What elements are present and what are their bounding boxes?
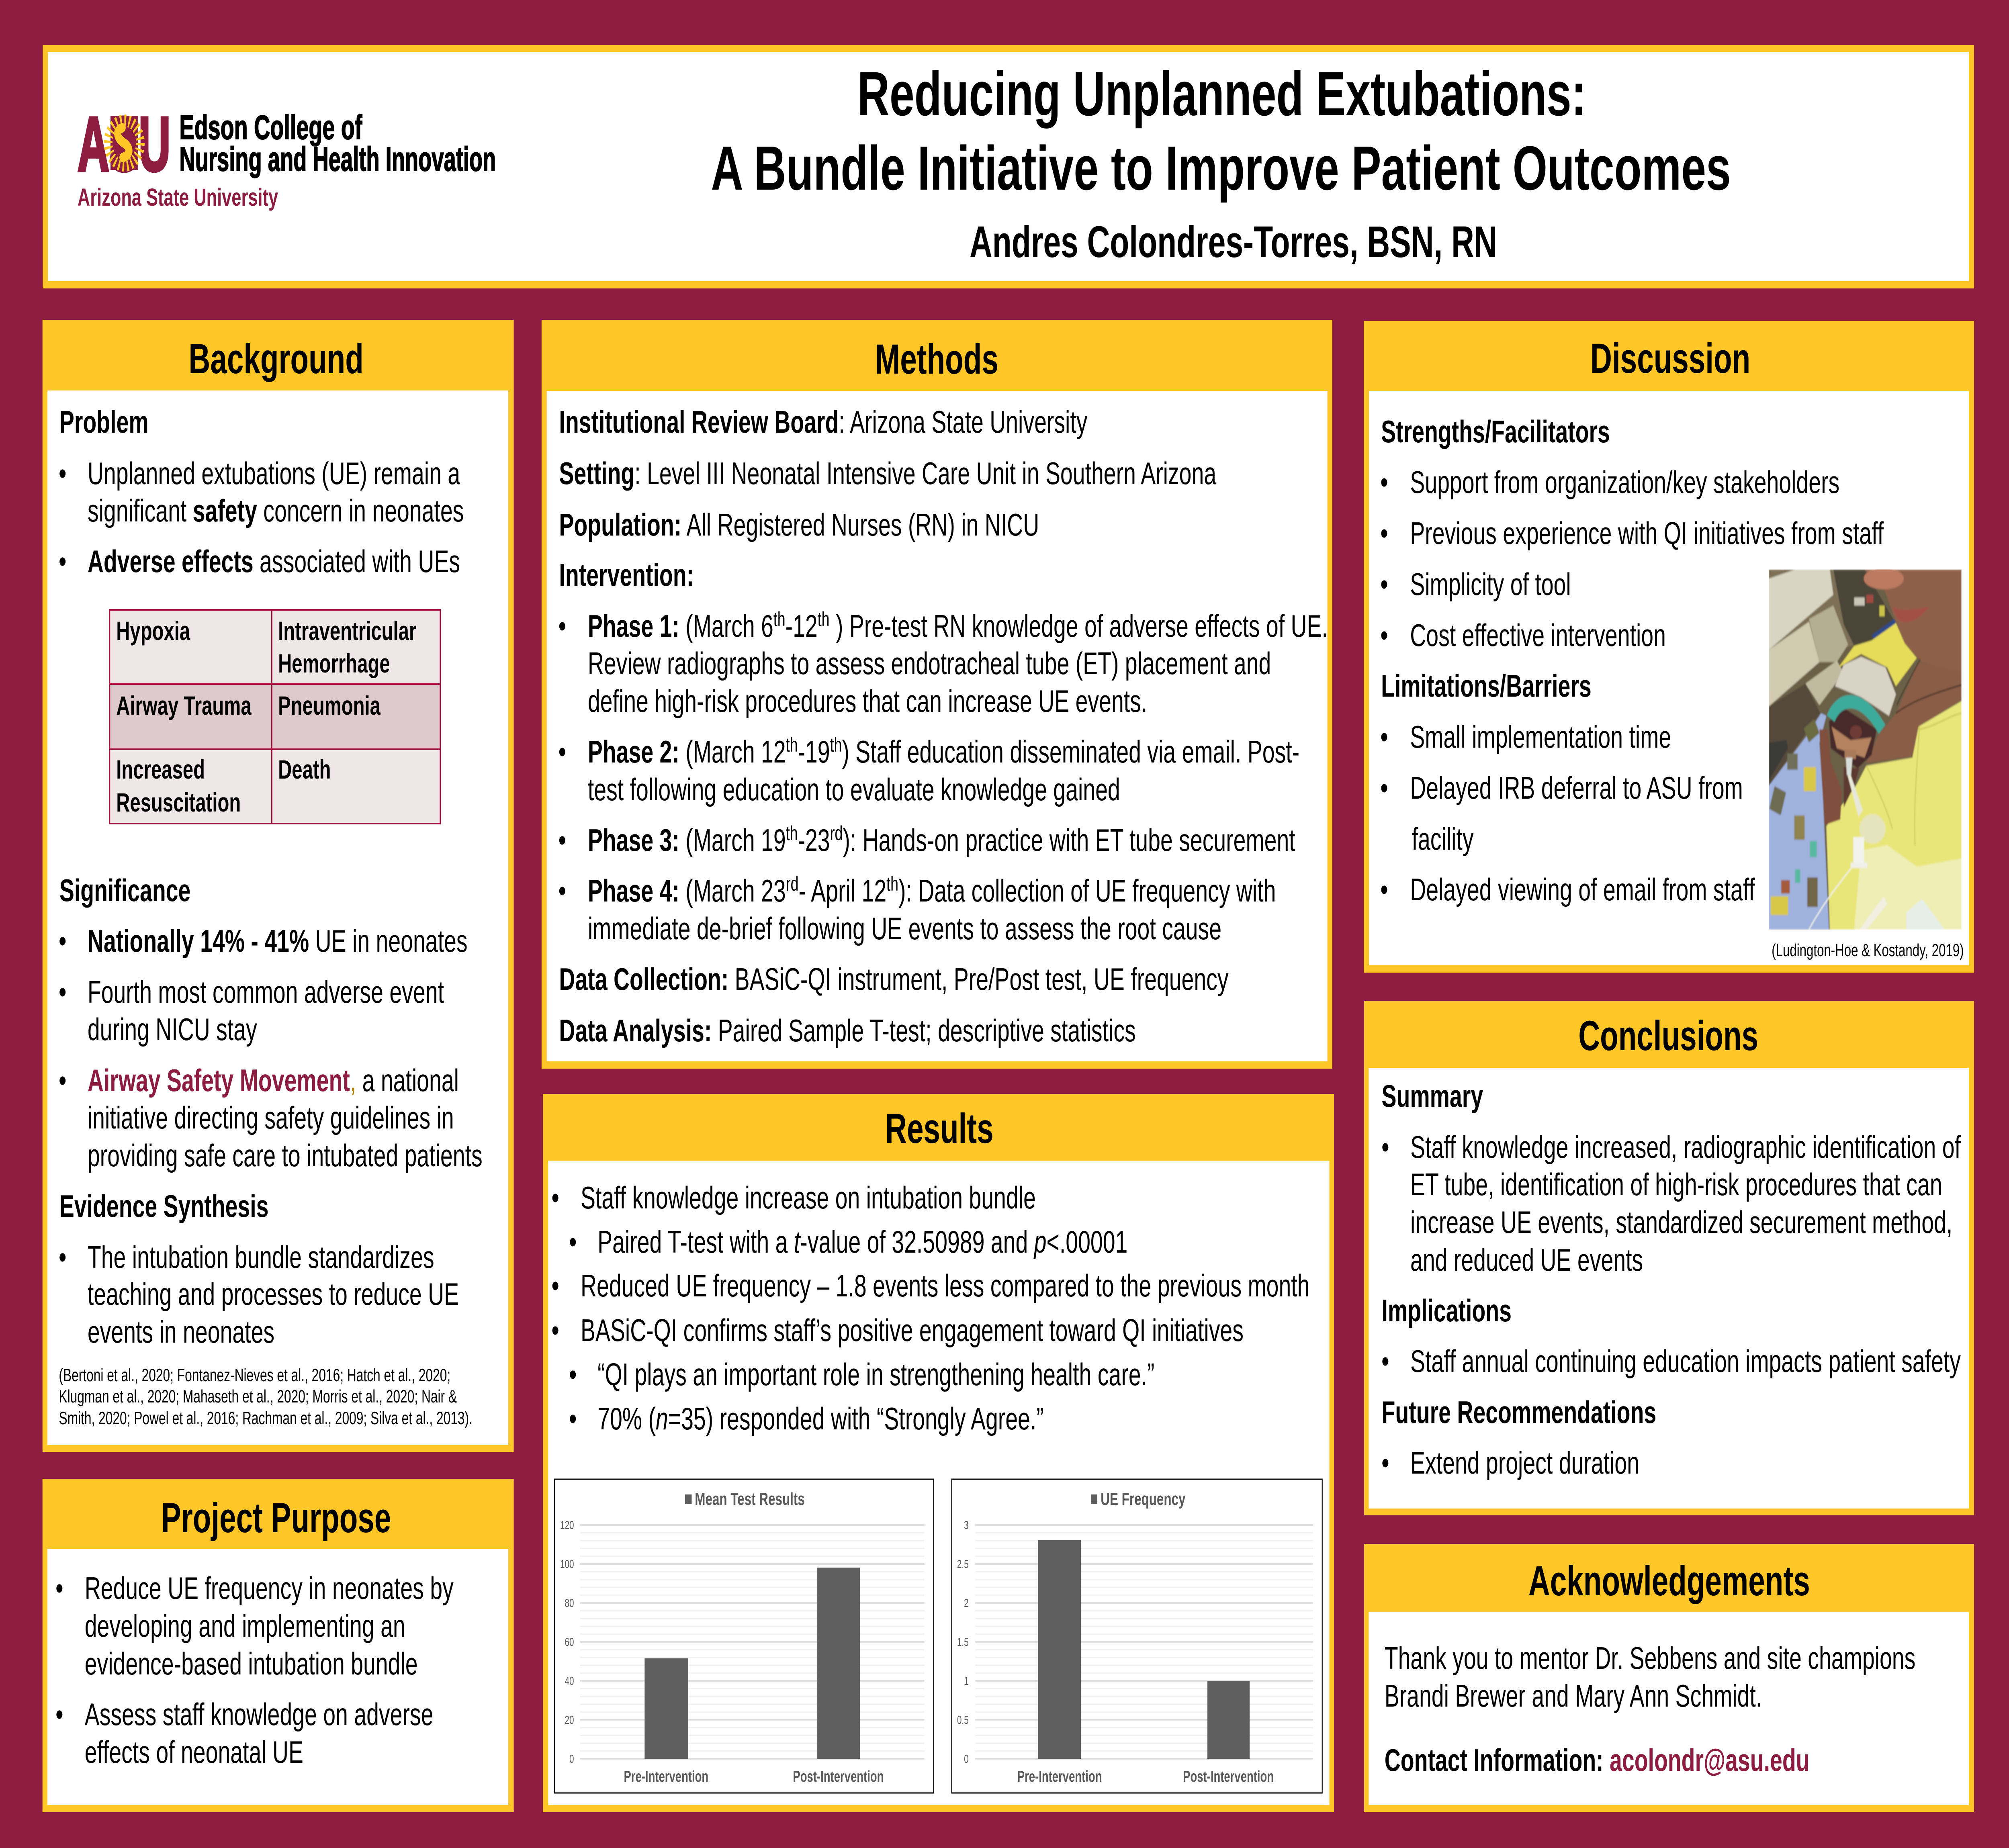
panel: conclusions bbox=[1364, 1001, 1974, 1515]
text block: future recommendations: • bbox=[1381, 1446, 1389, 1480]
text block: limitations: facility bbox=[1412, 822, 1474, 857]
table: adverse effects: Airway Trauma bbox=[116, 691, 252, 721]
text block: data collection and analysis bbox=[559, 962, 1229, 1048]
heading: results: Results bbox=[885, 1106, 994, 1152]
text block: purpose bullets: • bbox=[55, 1697, 63, 1732]
table: adverse effects: Intraventricular bbox=[278, 616, 416, 646]
logo: ASU Edson College: Edson College of bbox=[179, 109, 362, 146]
text block: thanks bbox=[1385, 1641, 1915, 1713]
photo caption: (Ludington-Hoe & Kostandy, 2019) bbox=[1772, 941, 1964, 960]
bar chart: mean test results: 40 bbox=[565, 1675, 574, 1688]
title bbox=[711, 59, 1731, 203]
text block: data collection and analysis: Data Analysis: Paired Sample T-test; descriptive statistics bbox=[559, 1014, 1136, 1048]
text block: implications: Implications bbox=[1382, 1294, 1512, 1328]
text block: significance: Nationally 14% - 41% UE in neonates bbox=[88, 924, 468, 959]
text block: intervention phases: ) Staff education disseminated via email. Post- bbox=[842, 735, 1299, 769]
text block: intervention phases: Phase 3: (March 19 bbox=[588, 823, 786, 858]
text block: purpose bullets: developing and implementing an bbox=[85, 1609, 405, 1644]
text block: summary bbox=[1381, 1079, 1961, 1278]
logo: ASU Edson College: ASU bbox=[78, 101, 170, 187]
title: Reducing Unplanned Extubations: bbox=[857, 59, 1586, 129]
bar chart: UE frequency bbox=[952, 1479, 1322, 1793]
text block: significance: • bbox=[59, 924, 66, 959]
text block: implications bbox=[1381, 1294, 1961, 1379]
text block: problem: Problem bbox=[59, 405, 149, 440]
table: adverse effects: Resuscitation bbox=[116, 788, 241, 818]
bar chart: UE frequency: Pre-Intervention bbox=[1017, 1768, 1102, 1785]
bar chart: UE frequency: 0 bbox=[964, 1753, 969, 1766]
bar chart: UE frequency: 1 bbox=[964, 1675, 969, 1688]
text block: strengths: Simplicity of tool bbox=[1410, 567, 1571, 602]
text block: results bullets: • bbox=[569, 1402, 577, 1436]
text block: results bullets: • bbox=[551, 1313, 559, 1348]
text block: intervention phases: test following education to evaluate knowledge gained bbox=[588, 773, 1120, 807]
text block: strengths bbox=[1380, 415, 1884, 653]
text block: study details: Institutional Review Board: Arizona State University bbox=[559, 405, 1088, 440]
text block: problem: • bbox=[59, 544, 66, 579]
text block: strengths: • bbox=[1380, 618, 1388, 653]
text block: intervention phases: -12 bbox=[786, 609, 818, 644]
text block: intervention phases: th bbox=[830, 734, 842, 756]
text block: results bullets: Staff knowledge increase on intubation bundle bbox=[581, 1181, 1036, 1215]
text block: intervention phases: th bbox=[786, 822, 798, 845]
text block: purpose bullets: Reduce UE frequency in neonates by bbox=[85, 1571, 454, 1606]
bar chart: UE frequency: Post-Intervention bbox=[1183, 1768, 1274, 1785]
text block: significance bbox=[59, 873, 483, 1173]
bar chart: UE frequency: 3 bbox=[964, 1519, 969, 1532]
text block: results bullets: 70% (n=35) responded with “Strongly Agree.” bbox=[597, 1402, 1044, 1436]
bar chart: mean test results: 100 bbox=[560, 1558, 574, 1571]
panel: results bbox=[543, 1094, 1334, 1812]
text block: significance: Airway Safety Movement, a national bbox=[88, 1063, 459, 1098]
panel: acknowledgements bbox=[1364, 1544, 1974, 1812]
text block: study details: Population: All Registered Nurses (RN) in NICU bbox=[559, 508, 1039, 542]
text block: limitations: • bbox=[1380, 771, 1388, 805]
text block: significance: initiative directing safety guidelines in bbox=[88, 1101, 454, 1135]
text block: summary: Staff knowledge increased, radiographic identification of bbox=[1410, 1130, 1961, 1165]
text block: purpose bullets: • bbox=[55, 1571, 63, 1606]
table: adverse effects: Increased bbox=[116, 755, 205, 785]
text block: results bullets: “QI plays an important role in strengthening health care.” bbox=[597, 1357, 1154, 1392]
text block: problem bbox=[59, 405, 464, 579]
bar chart: UE frequency: UE Frequency bbox=[1101, 1489, 1186, 1509]
text block: significance: providing safe care to intubated patients bbox=[88, 1139, 483, 1173]
text block: intervention phases: -19 bbox=[798, 735, 830, 769]
text block: limitations: Limitations/Barriers bbox=[1381, 669, 1592, 703]
logo: ASU Edson College: Arizona State University bbox=[78, 184, 278, 211]
text block: intervention phases: Review radiographs to assess endotracheal tube (ET) placement and bbox=[588, 646, 1271, 681]
text block: intervention phases: - April 12 bbox=[798, 874, 886, 908]
bar chart: mean test results: 80 bbox=[565, 1597, 574, 1610]
heading: acknowledgements: Acknowledgements bbox=[1528, 1558, 1810, 1605]
text block: intervention phases: • bbox=[559, 823, 566, 858]
text block: summary: and reduced UE events bbox=[1410, 1243, 1643, 1278]
text block: future recommendations bbox=[1381, 1395, 1656, 1480]
text block: strengths: Cost effective intervention bbox=[1410, 618, 1666, 653]
text block: intervention phases: Phase 1: (March 6 bbox=[588, 609, 773, 644]
text block: significance: Significance bbox=[59, 873, 190, 908]
text block: intervention phases: th bbox=[773, 608, 786, 631]
text block: implications: Staff annual continuing education impacts patient safety bbox=[1410, 1344, 1961, 1379]
text block: strengths: • bbox=[1380, 567, 1388, 602]
heading: project purpose: Project Purpose bbox=[161, 1495, 391, 1541]
text block: results bullets bbox=[551, 1181, 1310, 1436]
text block: evidence synthesis: Evidence Synthesis bbox=[59, 1189, 268, 1224]
text block: purpose bullets bbox=[55, 1571, 454, 1770]
text block: evidence synthesis: • bbox=[59, 1240, 66, 1275]
title: A Bundle Initiative to Improve Patient Outcomes bbox=[711, 133, 1731, 203]
text block: limitations: • bbox=[1380, 720, 1388, 754]
table: adverse effects bbox=[110, 610, 440, 824]
text block: limitations: Delayed viewing of email from staff bbox=[1410, 873, 1755, 907]
text block: purpose bullets: effects of neonatal UE bbox=[85, 1735, 303, 1770]
text block: results bullets: • bbox=[569, 1357, 577, 1392]
text block: results bullets: • bbox=[551, 1181, 559, 1215]
text block: significance: • bbox=[59, 1063, 66, 1098]
text block: limitations: • bbox=[1380, 873, 1388, 907]
text block: significance: during NICU stay bbox=[88, 1012, 257, 1047]
bar chart: mean test results: 60 bbox=[565, 1636, 574, 1649]
text block: significance: • bbox=[59, 975, 66, 1010]
text block: intervention phases: Phase 4: (March 23 bbox=[588, 874, 786, 908]
table: adverse effects: Hypoxia bbox=[116, 616, 190, 646]
bar chart: UE frequency: 2 bbox=[964, 1597, 969, 1610]
bar chart: mean test results: 20 bbox=[565, 1714, 574, 1727]
logo: ASU Edson College bbox=[78, 101, 496, 211]
bar chart: mean test results: Pre-Intervention bbox=[624, 1768, 708, 1785]
text block: intervention phases: ) Pre-test RN knowledge of adverse effects of UE. bbox=[830, 609, 1328, 644]
text block: data collection and analysis: Data Collection: BASiC-QI instrument, Pre/Post test, UE frequency bbox=[559, 962, 1229, 997]
heading: conclusions: Conclusions bbox=[1578, 1013, 1758, 1059]
bar chart: mean test results: 0 bbox=[569, 1753, 574, 1766]
table: adverse effects: Death bbox=[278, 755, 331, 785]
text block: evidence synthesis: The intubation bundle standardizes bbox=[88, 1240, 434, 1275]
heading: methods: Methods bbox=[875, 336, 998, 383]
text block: intervention phases: th bbox=[818, 608, 830, 631]
references: Klugman et al., 2020; Mahaseth et al., 2020; Morris et al., 2020; Nair & bbox=[59, 1387, 457, 1406]
table: adverse effects: Hemorrhage bbox=[278, 649, 390, 679]
references: Smith, 2020; Powel et al., 2016; Rachman et al., 2009; Silva et al., 2013). bbox=[59, 1408, 473, 1428]
text block: study details bbox=[559, 405, 1217, 593]
text block: problem: Unplanned extubations (UE) remain a bbox=[88, 456, 460, 491]
panel: background bbox=[43, 320, 514, 1452]
text block: strengths: Support from organization/key stakeholders bbox=[1410, 465, 1839, 500]
text block: problem: Adverse effects associated with UEs bbox=[88, 544, 460, 579]
text block: results bullets: Paired T-test with a t-value of 32.50989 and p<.00001 bbox=[597, 1225, 1127, 1259]
text block: study details: Intervention: bbox=[559, 558, 694, 593]
bar chart: mean test results: Mean Test Results bbox=[695, 1489, 805, 1509]
text block: results bullets: • bbox=[551, 1269, 559, 1303]
panel: discussion bbox=[1364, 321, 1974, 973]
text block: limitations: Small implementation time bbox=[1410, 720, 1671, 754]
heading: discussion: Discussion bbox=[1590, 335, 1750, 382]
text block: results bullets: BASiC-QI confirms staff’s positive engagement toward QI initiatives bbox=[581, 1313, 1244, 1348]
text block: intervention phases: • bbox=[559, 874, 566, 908]
text block: intervention phases bbox=[559, 608, 1328, 946]
bar chart: UE frequency: 0.5 bbox=[957, 1714, 969, 1727]
author: Andres Colondres-Torres, BSN, RN bbox=[970, 217, 1497, 267]
header banner bbox=[43, 45, 1974, 288]
text block: future recommendations: Extend project duration bbox=[1410, 1446, 1639, 1480]
text block: intervention phases: -23 bbox=[798, 823, 830, 858]
photo: intubated neonate on caregiver's chest bbox=[1769, 568, 1962, 930]
bar chart: mean test results: 120 bbox=[560, 1519, 574, 1532]
logo: ASU Edson College: Nursing and Health Innovation bbox=[179, 141, 496, 178]
panel: project purpose bbox=[43, 1479, 514, 1812]
text block: intervention phases: th bbox=[786, 734, 798, 756]
panel: methods bbox=[542, 320, 1332, 1069]
text block: strengths: • bbox=[1380, 516, 1388, 551]
text block: purpose bullets: evidence-based intubation bundle bbox=[85, 1647, 418, 1681]
text block: intervention phases: ): Data collection of UE frequency with bbox=[898, 874, 1276, 908]
table: adverse effects: Pneumonia bbox=[278, 691, 381, 721]
text block: limitations: Delayed IRB deferral to ASU from bbox=[1410, 771, 1743, 805]
text block: summary: • bbox=[1381, 1130, 1389, 1165]
text block: results bullets: Reduced UE frequency – 1.8 events less compared to the previous month bbox=[581, 1269, 1310, 1303]
text block: intervention phases: ): Hands-on practice with ET tube securement bbox=[843, 823, 1295, 858]
text block: purpose bullets: Assess staff knowledge on adverse bbox=[85, 1697, 433, 1732]
text block: intervention phases: immediate de-brief following UE events to assess the root cause bbox=[588, 912, 1221, 946]
text block: intervention phases: • bbox=[559, 609, 566, 644]
text block: evidence synthesis: teaching and processes to reduce UE bbox=[88, 1277, 459, 1312]
heading: background: Background bbox=[188, 336, 364, 382]
text block: problem: significant safety concern in neonates bbox=[88, 494, 464, 528]
text block: intervention phases: Phase 2: (March 12 bbox=[588, 735, 786, 769]
bar chart: mean test results: Post-Intervention bbox=[793, 1768, 884, 1785]
bar chart: UE frequency: 2.5 bbox=[957, 1558, 969, 1571]
text block: intervention phases: • bbox=[559, 735, 566, 769]
text block: problem: • bbox=[59, 456, 66, 491]
text block: limitations bbox=[1380, 669, 1755, 907]
text block: future recommendations: Future Recommendations bbox=[1382, 1395, 1656, 1430]
text block: intervention phases: rd bbox=[786, 873, 798, 895]
contact information: Contact Information: acolondr@asu.edu bbox=[1385, 1743, 1810, 1778]
text block: intervention phases: rd bbox=[830, 822, 843, 845]
text block: intervention phases: define high-risk procedures that can increase UE events. bbox=[588, 684, 1147, 719]
references: (Bertoni et al., 2020; Fontanez-Nieves et al., 2016; Hatch et al., 2020; bbox=[59, 1366, 450, 1385]
text block: summary: Summary bbox=[1382, 1079, 1483, 1114]
references bbox=[59, 1366, 473, 1428]
text block: study details: Setting: Level III Neonatal Intensive Care Unit in Southern Arizona bbox=[559, 456, 1217, 491]
text block: results bullets: • bbox=[569, 1225, 577, 1259]
bar chart: UE frequency: 1.5 bbox=[957, 1636, 969, 1649]
text block: implications: • bbox=[1381, 1344, 1389, 1379]
bar chart: mean test results bbox=[554, 1479, 934, 1793]
text block: thanks: Thank you to mentor Dr. Sebbens and site champions bbox=[1385, 1641, 1915, 1676]
text block: intervention phases: th bbox=[886, 873, 898, 895]
text block: thanks: Brandi Brewer and Mary Ann Schmidt. bbox=[1385, 1679, 1762, 1713]
text block: strengths: • bbox=[1380, 465, 1388, 500]
text block: evidence synthesis: events in neonates bbox=[88, 1315, 274, 1349]
text block: summary: ET tube, identification of high-risk procedures that can bbox=[1410, 1167, 1942, 1202]
text block: summary: increase UE events, standardized securement method, bbox=[1410, 1205, 1952, 1240]
text block: strengths: Strengths/Facilitators bbox=[1381, 415, 1610, 449]
text block: significance: Fourth most common adverse event bbox=[88, 975, 444, 1010]
text block: evidence synthesis bbox=[59, 1189, 459, 1349]
text block: strengths: Previous experience with QI initiatives from staff bbox=[1410, 516, 1884, 551]
